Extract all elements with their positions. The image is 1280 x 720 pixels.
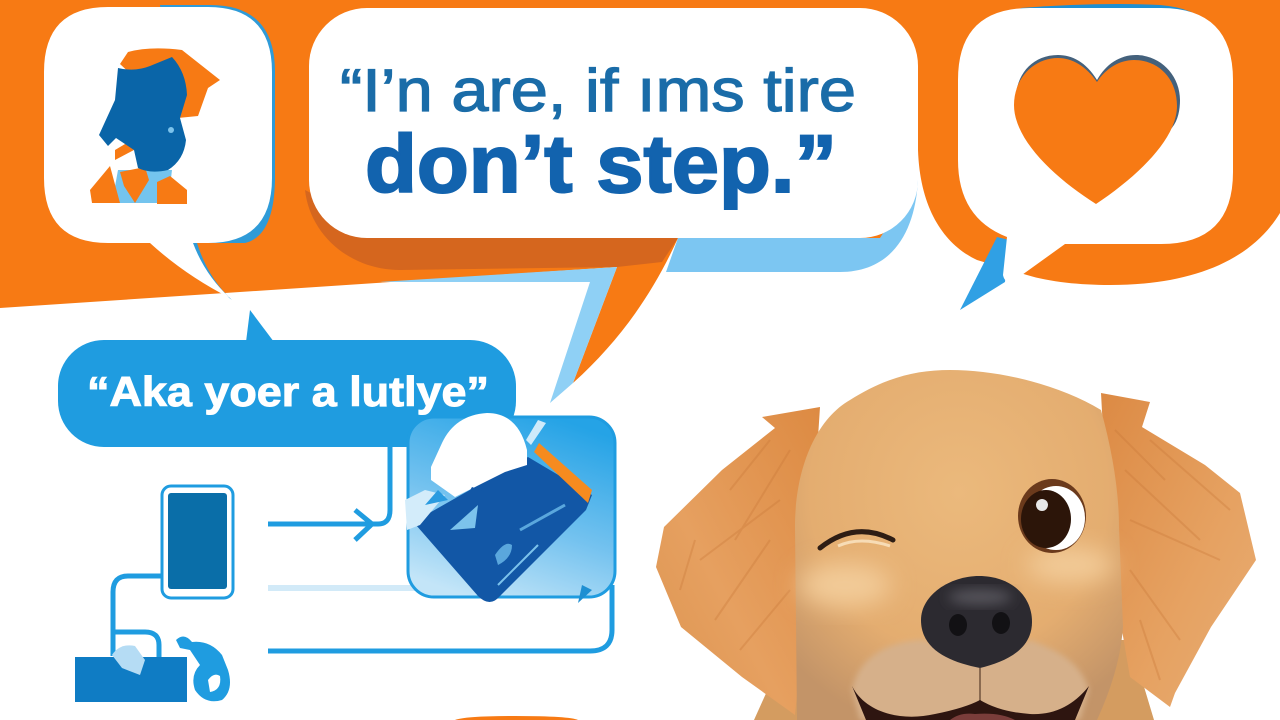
icon: person silhouette [90,48,220,204]
blue speech pill [58,310,516,447]
light blue pointer band [380,267,617,403]
icon: folded document tile [405,413,615,603]
dog body fur [754,640,1154,720]
flow lines and arrows [113,447,612,657]
quote line 2: don’t step.” [365,119,837,210]
icon: heart [1014,55,1180,204]
tongue [950,714,1015,720]
dog illustration [656,370,1256,720]
mouth [852,686,1089,720]
dog right ear [1101,393,1256,707]
dog left ear [656,407,820,715]
quote bubble: main headline [305,8,918,272]
dog head [795,370,1123,720]
quote line 1: “I’n are, if ıms tire [340,57,856,124]
icon: tablet [162,486,233,598]
orange header banner [0,0,1280,383]
open eye [1018,479,1086,553]
winking eye [820,532,893,548]
nose [921,576,1032,668]
icon: box with figure [75,636,230,702]
philtrum [979,668,981,702]
speech bubble: person icon [44,5,275,300]
ear fur strokes [680,430,1230,680]
muzzle [852,640,1089,720]
orange bottom tab [455,716,578,720]
speech bubble: heart [958,4,1233,310]
cheek highlights [799,547,1114,607]
pill label: “Aka yoer a lutlye” [87,368,489,415]
